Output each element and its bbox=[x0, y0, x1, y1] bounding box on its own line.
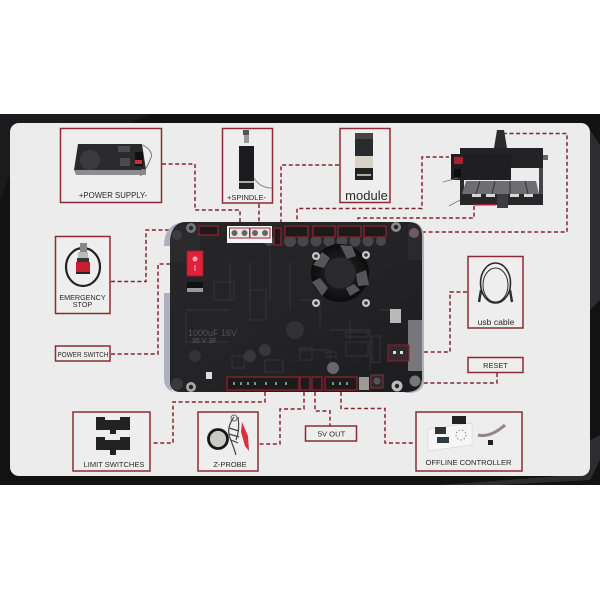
cooling fan bbox=[311, 244, 370, 307]
panel: 5v out: 5V OUT bbox=[318, 430, 346, 438]
dark background band bbox=[0, 114, 600, 485]
label: LIMIT SWITCHES bbox=[84, 460, 144, 469]
red rocker power switch bbox=[187, 251, 203, 292]
label: Z-PROBE bbox=[213, 460, 247, 469]
panel: emergency stop bbox=[56, 236, 110, 314]
light panel bbox=[10, 123, 590, 476]
icon: spindle motor bbox=[239, 130, 272, 189]
power terminal block bbox=[227, 226, 272, 243]
panel: spindle bbox=[222, 128, 272, 203]
panel: reset bbox=[468, 358, 523, 372]
panel: power switch bbox=[56, 346, 110, 361]
label: usb cable bbox=[478, 317, 515, 327]
panel: z-probe bbox=[198, 412, 258, 471]
label: +SPINDLE- bbox=[227, 193, 266, 202]
panel: 5v out bbox=[306, 426, 356, 441]
icon: limit switches bbox=[96, 417, 130, 455]
label: module bbox=[345, 188, 388, 203]
panel: offline controller bbox=[416, 412, 522, 471]
capacitors bbox=[189, 235, 386, 374]
icon: emergency stop button bbox=[66, 243, 100, 286]
connection lines bbox=[111, 134, 567, 444]
qr code bbox=[390, 309, 401, 323]
board silkscreen text bbox=[188, 328, 237, 345]
reset button bbox=[371, 375, 383, 388]
panel: emergency stop: STOP bbox=[73, 300, 92, 309]
traces and chips bbox=[186, 250, 400, 372]
icon: laser module bbox=[355, 133, 373, 180]
panel: limit switches bbox=[73, 412, 150, 471]
panel: usb cable bbox=[468, 256, 523, 328]
bottom connectors bbox=[227, 377, 369, 390]
label: OFFLINE CONTROLLER bbox=[425, 458, 512, 467]
board body bbox=[170, 222, 422, 392]
icon: z-probe disc and clip bbox=[208, 415, 249, 455]
icon: usb cable bbox=[479, 263, 512, 303]
icon: offline controller and cable bbox=[428, 416, 505, 451]
controller board bbox=[164, 222, 424, 393]
top connectors bbox=[199, 226, 386, 245]
board silkscreen text: 1000uF 16V bbox=[188, 328, 237, 338]
panel: power switch: POWER SWITCH bbox=[58, 352, 108, 359]
label: +POWER SUPPLY- bbox=[79, 191, 148, 200]
panel: reset: RESET bbox=[483, 361, 508, 370]
corner blocks bbox=[170, 224, 422, 384]
usb port bbox=[388, 345, 409, 361]
label: EMERGENCY bbox=[59, 293, 106, 302]
icon: power supply unit bbox=[74, 144, 151, 176]
right light strip bbox=[408, 320, 422, 371]
board edge highlights bbox=[164, 222, 424, 393]
board silkscreen text: 35 V 3F bbox=[192, 338, 217, 345]
icon: cnc engraving machine bbox=[443, 130, 548, 208]
panel: laser module bbox=[340, 128, 390, 203]
mounting screws bbox=[171, 222, 420, 392]
panel: power supply bbox=[60, 128, 162, 202]
